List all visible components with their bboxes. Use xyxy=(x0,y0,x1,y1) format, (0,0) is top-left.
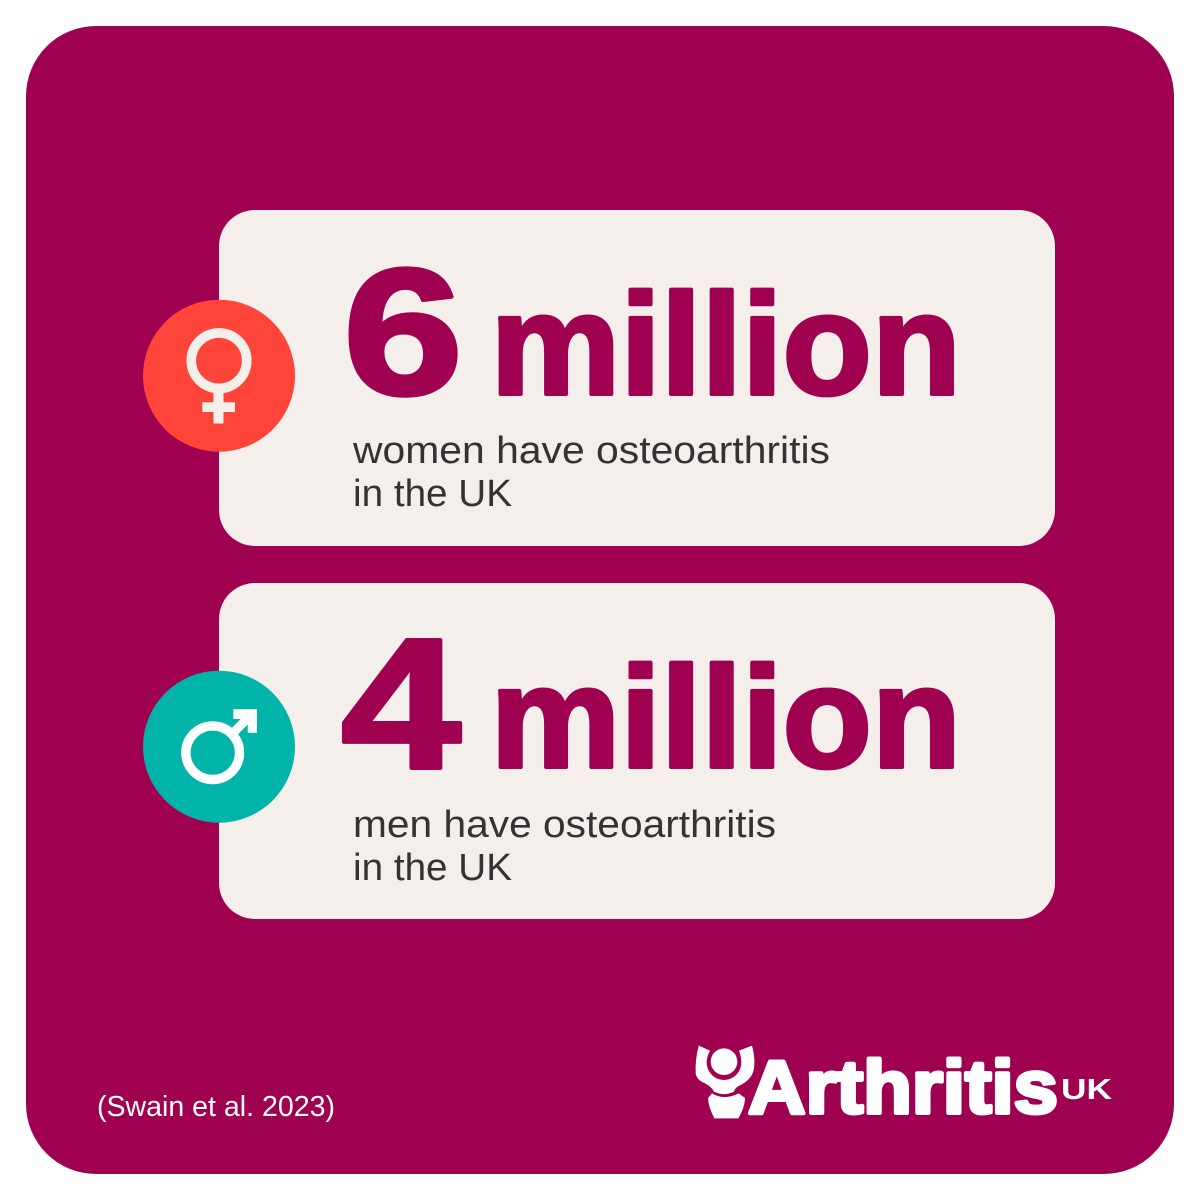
headline: 4 million: million xyxy=(490,637,961,798)
card background: women xyxy=(219,210,1055,546)
wordmark: Arthritis xyxy=(748,1045,1058,1129)
headline: 4 million: 4 xyxy=(341,601,461,808)
headline: 6 million: million xyxy=(490,264,961,425)
icon: figure with raised arms xyxy=(696,1046,754,1118)
card background: men xyxy=(219,583,1055,919)
text: men have osteoarthritis in the UK: men have osteoarthritis xyxy=(353,804,776,846)
text: men have osteoarthritis in the UK xyxy=(353,804,776,889)
citation: (Swain et al. 2023) xyxy=(97,1091,335,1123)
wordmark: UK: UK xyxy=(1061,1074,1112,1106)
logo: Arthritis UK xyxy=(696,1045,1112,1129)
headline: 6 million: 6 xyxy=(343,232,463,433)
panel: men statistic xyxy=(219,583,1055,919)
icon: male symbol xyxy=(143,671,295,823)
text: women have osteoarthritis in the UK: in the UK xyxy=(353,473,512,515)
text: women have osteoarthritis in the UK: women have osteoarthritis xyxy=(352,430,830,472)
text: men have osteoarthritis in the UK: in the UK xyxy=(353,847,512,889)
icon: female symbol xyxy=(143,300,295,452)
headline: 4 million xyxy=(341,601,961,808)
headline: 6 million xyxy=(343,232,961,433)
panel: women statistic xyxy=(219,210,1055,546)
text: women have osteoarthritis in the UK xyxy=(352,430,830,515)
